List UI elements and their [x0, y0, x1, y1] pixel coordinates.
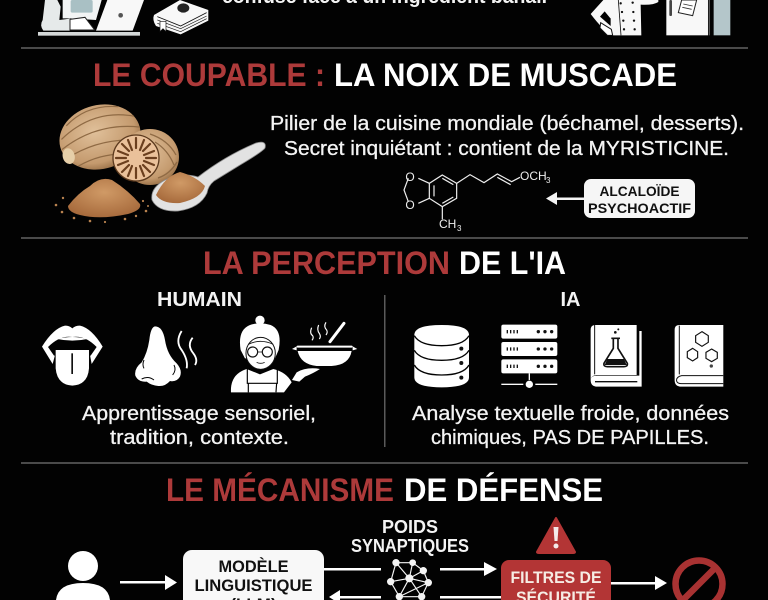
second nutmeg — [121, 129, 179, 185]
icon: user — [56, 551, 110, 600]
divider — [21, 462, 748, 464]
heading: mécanisme: DE DÉFENSE — [404, 472, 603, 508]
label: humain: HUMAIN — [157, 289, 242, 311]
box: safety filters: FILTRES DE — [510, 568, 602, 587]
heading: la perception: DE L'IA — [459, 245, 566, 281]
chart: myristicin molecule: OCH — [520, 169, 547, 183]
icon: chemistry book — [591, 325, 642, 387]
icon: tongue — [42, 326, 103, 386]
arrow: filters back to weights — [440, 596, 501, 598]
chart: myristicin molecule: O — [405, 170, 415, 184]
chart: myristicin molecule: CH — [439, 217, 456, 231]
text block: nutmeg description: Pilier de la cuisine mondiale (béchamel, desserts). — [270, 113, 744, 135]
arrow: label to molecule — [546, 192, 584, 205]
label: synaptic weights — [351, 517, 469, 556]
icon: neural network — [387, 559, 432, 600]
icon: database — [414, 325, 469, 387]
callout: alcaloide psychoactif — [584, 179, 695, 218]
icon: molecule book — [675, 325, 723, 387]
heading: la perception: LA PERCEPTION — [203, 245, 450, 281]
label: synaptic weights: SYNAPTIQUES — [351, 536, 469, 556]
box: linguistic model: MODÈLE — [218, 557, 288, 576]
arrow: user to model — [120, 575, 177, 590]
vertical divider — [384, 295, 386, 447]
callout: alcaloide psychoactif: ALCALOÏDE — [600, 183, 680, 199]
text block: nutmeg description — [270, 113, 744, 160]
box: safety filters — [501, 560, 611, 600]
callout: alcaloide psychoactif: PSYCHOACTIF — [588, 200, 691, 216]
chart: myristicin molecule: 3 — [457, 224, 462, 233]
arrow: weights to filters — [440, 562, 497, 576]
arrow: model to weights — [324, 568, 381, 570]
heading: le coupable — [93, 57, 677, 93]
powder specks — [55, 197, 149, 223]
label: ia: IA — [560, 289, 580, 311]
box: linguistic model — [183, 550, 324, 600]
text block: ai: chimiques, PAS DE PAPILLES. — [431, 427, 709, 449]
divider — [21, 47, 748, 49]
chart: myristicin molecule: 3 — [546, 176, 551, 185]
text block: ai: Analyse textuelle froide, données — [412, 403, 729, 425]
spoon — [152, 142, 265, 211]
text block: human — [82, 403, 316, 449]
icon: chef — [591, 0, 658, 35]
icon: nose with smell — [135, 326, 196, 386]
icon: book — [153, 0, 208, 34]
nutmeg cross-section — [113, 135, 159, 181]
icon: grandmother — [231, 316, 292, 392]
text block: human: tradition, contexte. — [110, 427, 289, 449]
icon: fridge — [666, 0, 730, 35]
heading: le coupable: LE COUPABLE : — [93, 57, 325, 93]
icon: wok with steam — [292, 322, 357, 382]
arrow: weights to model — [329, 590, 381, 600]
text block: ai — [412, 403, 729, 449]
label: synaptic weights: POIDS — [382, 517, 438, 537]
box: linguistic model: LINGUISTIQUE — [194, 576, 312, 595]
icon: warning — [537, 518, 575, 553]
heading: mécanisme: LE MÉCANISME — [166, 472, 394, 508]
chart: myristicin molecule — [404, 169, 551, 233]
heading: mécanisme — [166, 472, 603, 508]
icon: server — [501, 325, 557, 388]
powder pile — [68, 179, 140, 217]
chart: myristicin molecule: O — [405, 198, 415, 212]
illustration: nutmeg — [52, 96, 265, 223]
heading: le coupable: LA NOIX DE MUSCADE — [334, 57, 677, 93]
text block: nutmeg description: Secret inquiétant : contient de la MYRISTICINE. — [284, 138, 729, 160]
icon: prohibited — [676, 560, 722, 600]
text block: human: Apprentissage sensoriel, — [82, 403, 316, 425]
arrow: filters to block — [611, 576, 667, 590]
icon: robot with laptop — [38, 0, 144, 36]
divider — [21, 237, 748, 239]
whole nutmeg — [52, 96, 148, 178]
